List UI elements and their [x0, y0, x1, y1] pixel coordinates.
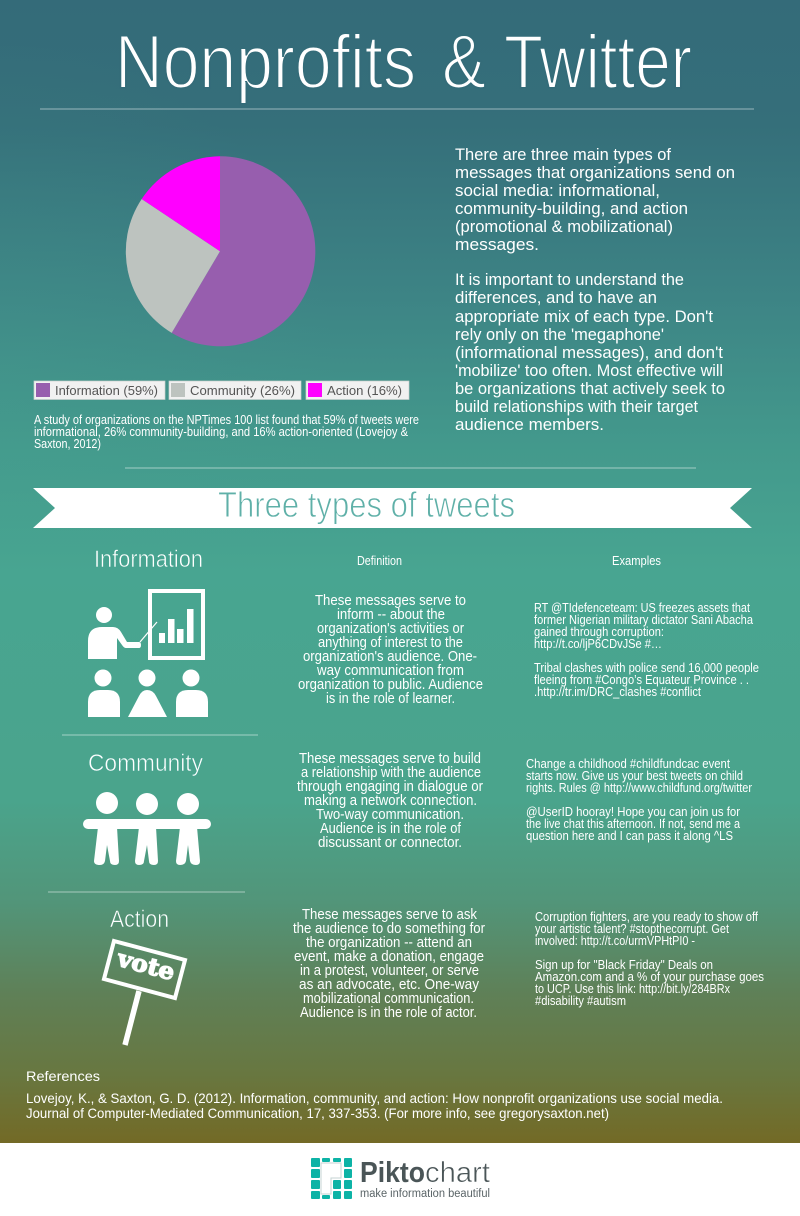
definition: community: These messages serve to build: [299, 750, 481, 767]
column heading: definition: Definition: [357, 553, 402, 568]
definition: community: a relationship with the audience: [301, 764, 481, 781]
definition: community: discussant or connector.: [318, 834, 462, 851]
reference citation: [26, 1090, 723, 1121]
definition: information: These messages serve to: [315, 592, 466, 609]
pie slice: community: [126, 199, 220, 333]
column heading: examples: Examples: [612, 553, 661, 568]
logo wordmark: Pikto: [360, 1157, 425, 1189]
banner: three types of tweets: [33, 484, 752, 528]
intro text: rely only on the 'megaphone': [455, 325, 664, 344]
intro text: build relationships with their target: [455, 397, 698, 416]
intro text: It is important to understand the: [455, 270, 684, 289]
intro text: There are three main types of: [455, 145, 671, 164]
examples: information: gained through corruption:: [534, 625, 664, 639]
definition: community: [297, 750, 483, 851]
examples: information: http://t.co/ljP6CDvJSe #…: [534, 637, 662, 651]
definition: action: as an advocate, etc. One-way: [299, 976, 479, 993]
definition: action: the audience to do something for: [293, 920, 485, 937]
heading: action: Action: [110, 906, 169, 933]
examples: community: @UserID hooray! Hope you can join us for: [526, 805, 740, 819]
logo mark: [311, 1158, 352, 1199]
intro text: [455, 145, 735, 434]
references: [26, 1068, 723, 1121]
pie slice: information: [172, 156, 315, 346]
examples: community: [526, 757, 752, 843]
intro text: (informational messages), and don't: [455, 343, 723, 362]
examples: action: [535, 910, 764, 1008]
examples: information: Tribal clashes with police send 16,000 people: [534, 661, 759, 675]
legend item: community: [169, 381, 301, 400]
legend item: information: Information (59%): [55, 384, 158, 398]
intro text: appropriate mix of each type. Don't: [455, 307, 713, 326]
examples: action: to UCP. Use this link: http://bit.ly/284BRx: [535, 982, 731, 996]
examples: action: Sign up for "Black Friday" Deals on: [535, 958, 713, 972]
definition: community: Audience is in the role of: [320, 820, 462, 837]
intro text: 'mobilize' too often. Most effective will: [455, 361, 723, 380]
examples: action: #disability #autism: [535, 994, 626, 1008]
definition: action: event, make a donation, engage: [294, 948, 484, 965]
banner: three types of tweets: Three types of tweets: [218, 484, 515, 525]
chart caption: [34, 413, 419, 451]
definition: action: These messages serve to ask: [302, 906, 477, 923]
definition: community: through engaging in dialogue or: [297, 778, 483, 795]
definition: community: making a network connection.: [304, 792, 477, 809]
title: [115, 20, 692, 105]
footer logo: Piktochart: chart: [425, 1157, 490, 1189]
title: &: [442, 20, 486, 105]
definition: action: [293, 906, 485, 1021]
examples: action: Amazon.com and a % of your purchase goes: [535, 970, 764, 984]
intro text: differences, and to have an: [455, 288, 657, 307]
examples: community: Change a childhood #childfundcac event: [526, 757, 730, 771]
legend item: action: [306, 381, 409, 400]
intro text: (promotional & mobilizational): [455, 217, 673, 236]
chart caption: A study of organizations on the NPTimes 100 list found that 59% of tweets were: [34, 413, 419, 427]
chart legend: [34, 381, 409, 400]
reference citation: Lovejoy, K., & Saxton, G. D. (2012). Information, community, and action: How nonprofit organizations use social media.: [26, 1090, 723, 1106]
examples: community: the live chat this afternoon. If not, send me a: [526, 817, 740, 831]
intro text: audience members.: [455, 415, 604, 434]
examples: information: .http://tr.im/DRC_clashes #conflict: [534, 685, 701, 699]
chart caption: Saxton, 2012): [34, 437, 101, 451]
pie slice: action: [142, 156, 220, 251]
pie chart: [126, 156, 315, 346]
intro text: messages.: [455, 235, 539, 254]
definition: information: inform -- about the: [337, 606, 445, 623]
definition: information: is in the role of learner.: [326, 690, 455, 707]
definition: action: in a protest, volunteer, or serve: [300, 962, 479, 979]
definition: information: [298, 592, 483, 707]
legend item: information: [34, 381, 165, 400]
definition: action: Audience is in the role of actor.: [300, 1004, 477, 1021]
definition: community: Two-way communication.: [316, 806, 464, 823]
title: Nonprofits: [115, 20, 416, 105]
definition: information: organization to public. Audience: [298, 676, 483, 693]
examples: action: Corruption fighters, are you ready to show off: [535, 910, 758, 924]
icon: three people linked: [83, 792, 211, 865]
icon: vote sign: [104, 941, 185, 1045]
heading: information: Information: [94, 546, 203, 573]
examples: information: [534, 601, 759, 699]
examples: information: former Nigerian military dictator Sani Abacha: [534, 613, 753, 627]
legend item: community: Community (26%): [190, 384, 295, 398]
definition: action: mobilizational communication.: [303, 990, 474, 1007]
examples: community: question here and I can pass it along ^LS: [526, 829, 733, 843]
legend item: action: Action (16%): [327, 384, 402, 398]
examples: community: rights. Rules @ http://www.childfund.org/twitter: [526, 781, 752, 795]
examples: community: starts now. Give us your best tweets on child: [526, 769, 743, 783]
definition: information: way communication from: [316, 662, 464, 679]
examples: information: fleeing from #Congo’s Equateur Province . .: [534, 673, 749, 687]
definition: information: organization's activities or: [317, 620, 464, 637]
references heading: References: [26, 1068, 100, 1084]
heading: community: Community: [88, 750, 203, 777]
definition: information: organization's audience. One-: [303, 648, 477, 665]
icon: presenter and audience: [88, 591, 208, 717]
examples: action: your artistic talent? #stopthecorrupt. Get: [535, 922, 729, 936]
intro text: messages that organizations send on: [455, 163, 735, 182]
intro text: be organizations that actively seek to: [455, 379, 725, 398]
icon: vote sign: vote: [114, 945, 178, 986]
reference citation: Journal of Computer-Mediated Communication, 17, 337-353. (For more info, see gregorysaxton.net): [26, 1105, 609, 1121]
intro text: social media: informational,: [455, 181, 660, 200]
logo tagline: make information beautiful: [360, 1188, 490, 1200]
examples: information: RT @TIdefenceteam: US freezes assets that: [534, 601, 750, 615]
footer logo: Piktochart: [311, 1157, 490, 1200]
definition: action: the organization -- attend an: [306, 934, 472, 951]
chart caption: informational, 26% community-building, and 16% action-oriented (Lovejoy &: [34, 425, 409, 439]
definition: information: anything of interest to the: [318, 634, 463, 651]
title: Twitter: [504, 20, 692, 105]
examples: action: involved: http://t.co/urmVPHtPI0 -: [535, 934, 695, 948]
intro text: community-building, and action: [455, 199, 688, 218]
